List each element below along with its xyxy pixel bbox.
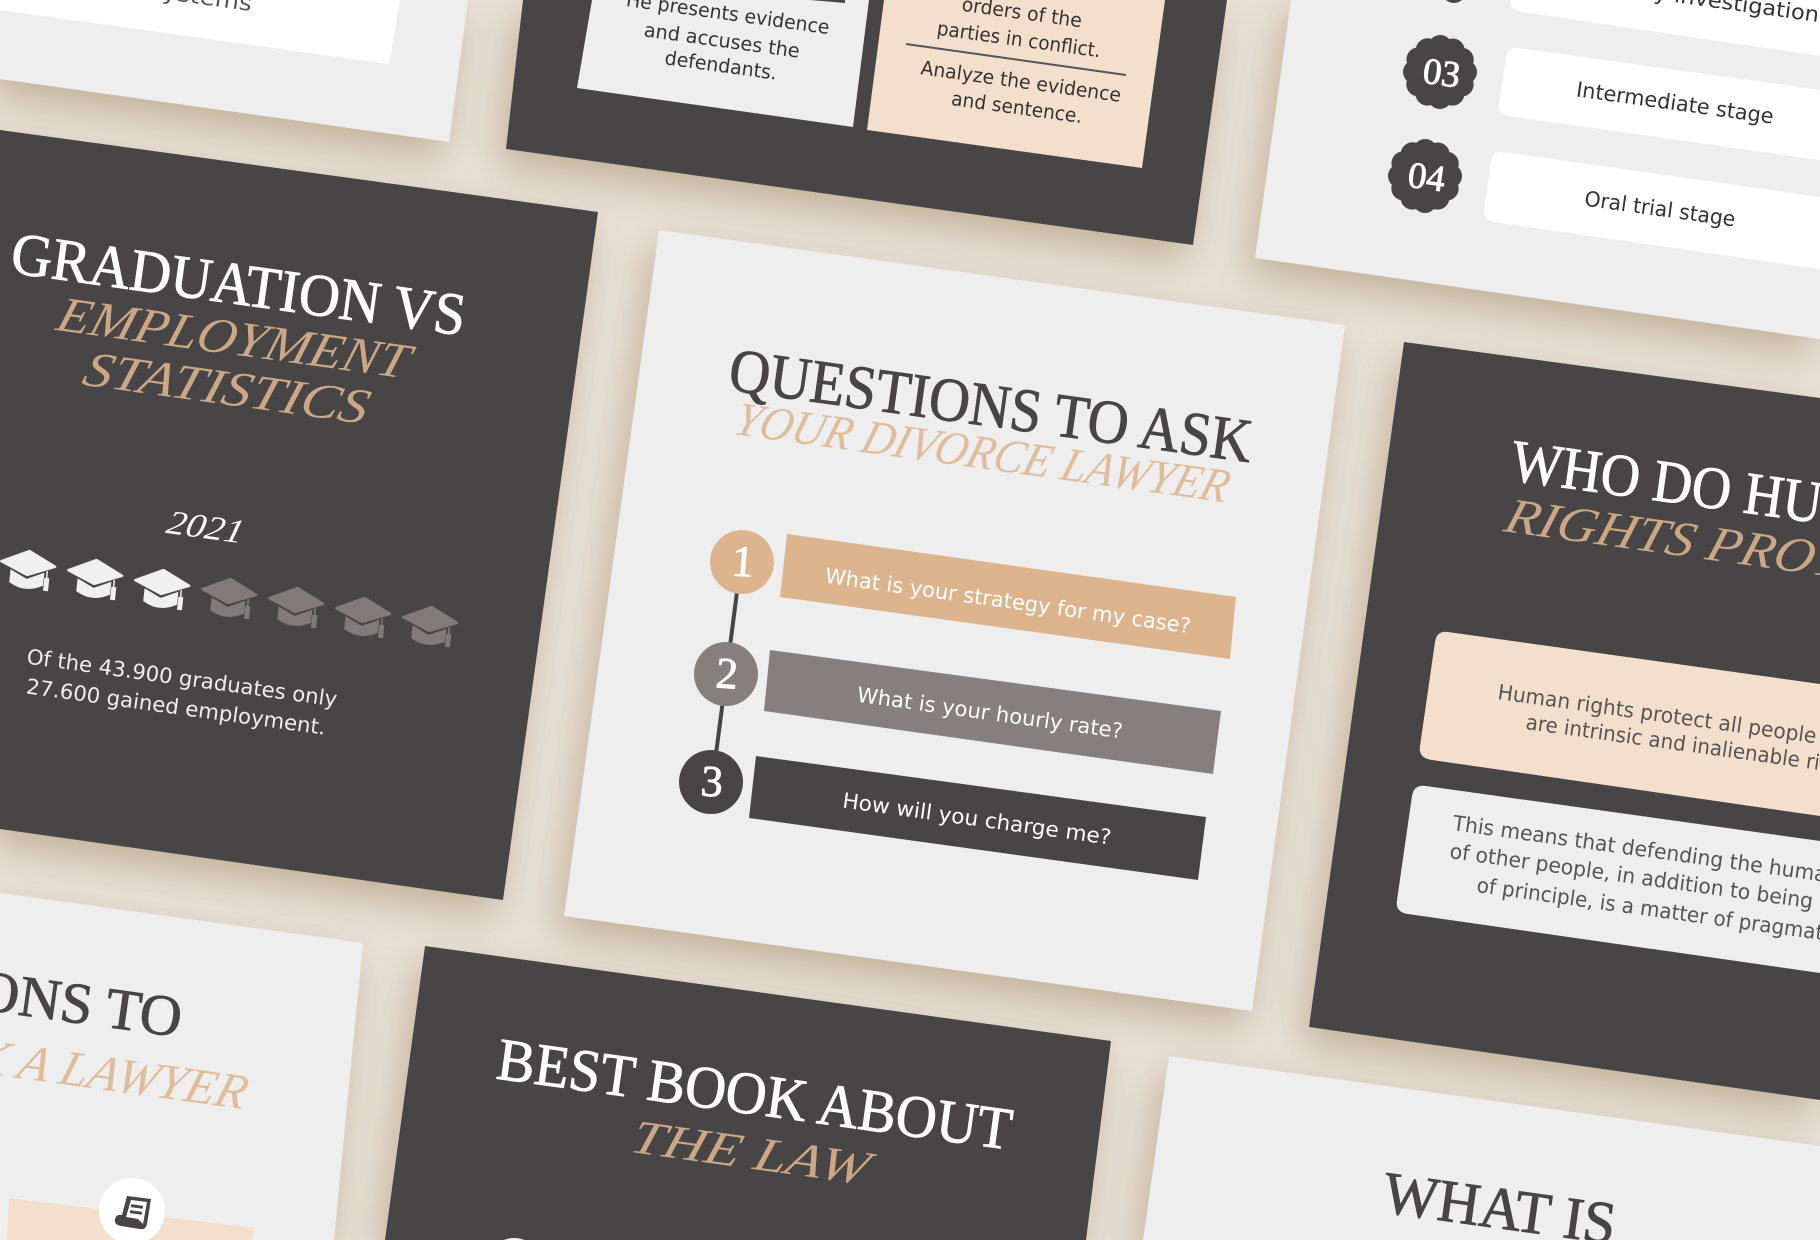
panel: questions to ask your divorce lawyer — [564, 230, 1345, 1011]
connector line — [716, 592, 737, 754]
question 2 number — [694, 642, 758, 706]
subtitle: employment statistics: EMPLOYMENT — [50, 286, 420, 389]
question 1 bar: What is your strategy for my case? — [824, 564, 1192, 638]
row: intermediate stage: Intermediate stage — [1575, 78, 1775, 129]
panel: top-center evidence card — [506, 0, 1227, 245]
question 2 number: 2 — [714, 648, 740, 699]
subtitle: your divorce lawyer: YOUR DIVORCE LAWYER — [729, 393, 1236, 513]
question 1 bar — [780, 534, 1236, 659]
icon: scroll in circle — [99, 1178, 165, 1240]
panel: top-left systems card — [0, 0, 468, 142]
question 1 number: 1 — [730, 536, 756, 587]
caption: graduates statistic: 27.600 gained employment. — [25, 674, 327, 740]
title: questions to ask: QUESTIONS TO ASK — [725, 336, 1257, 476]
panel: best book about the law — [385, 946, 1111, 1240]
subtitle: employment statistics: STATISTICS — [77, 341, 377, 434]
icon row: graduation caps — [0, 548, 458, 648]
title: graduation vs: GRADUATION VS — [7, 220, 470, 348]
question 2 bar: What is your hourly rate? — [856, 683, 1124, 743]
question 1 number — [710, 530, 774, 594]
callout: human rights — [1420, 632, 1820, 816]
panel: who do human rights protect — [1309, 342, 1820, 1100]
caption: graduates statistic: Of the 43.900 graduates only — [25, 645, 339, 711]
panel: what is — [1143, 1056, 1820, 1240]
badge: 03: 03 — [1420, 51, 1463, 96]
peach box — [7, 1198, 254, 1240]
question 3 number: 3 — [699, 756, 725, 807]
year label: 2021 — [163, 504, 248, 551]
panel: top-center evidence card: and accuses the — [643, 18, 801, 63]
panel: top-center evidence card: defendants. — [663, 46, 778, 85]
panel: top-center evidence card: Analyze the evidence — [919, 56, 1123, 107]
badge: 04: 04 — [1405, 155, 1448, 200]
question 3 bar — [749, 756, 1206, 880]
caption: graduates statistic — [25, 645, 339, 740]
panel: questions to ask a lawyer — [0, 893, 363, 1240]
row: oral trial stage: Oral trial stage — [1583, 187, 1737, 231]
row: preparatory investigation — [1510, 0, 1820, 56]
panel: top-center evidence card: parties in conflict. — [936, 17, 1102, 62]
question 2 bar — [764, 650, 1221, 774]
subtitle: the law: THE LAW — [625, 1111, 881, 1196]
panel: top-right trial stages card — [1255, 0, 1820, 339]
subtitle: employment statistics — [50, 286, 420, 434]
white badge top — [486, 1238, 542, 1240]
question 3 number — [679, 750, 743, 814]
question 3 bar: How will you charge me? — [841, 789, 1113, 850]
panel: top-center evidence card: and sentence. — [950, 87, 1084, 128]
row: intermediate stage — [1499, 48, 1820, 160]
row: oral trial stage — [1484, 152, 1820, 269]
panel: graduation vs employment statistics — [0, 130, 598, 900]
title: best book about: BEST BOOK ABOUT — [493, 1026, 1016, 1163]
callout: defending rights — [1397, 786, 1820, 973]
